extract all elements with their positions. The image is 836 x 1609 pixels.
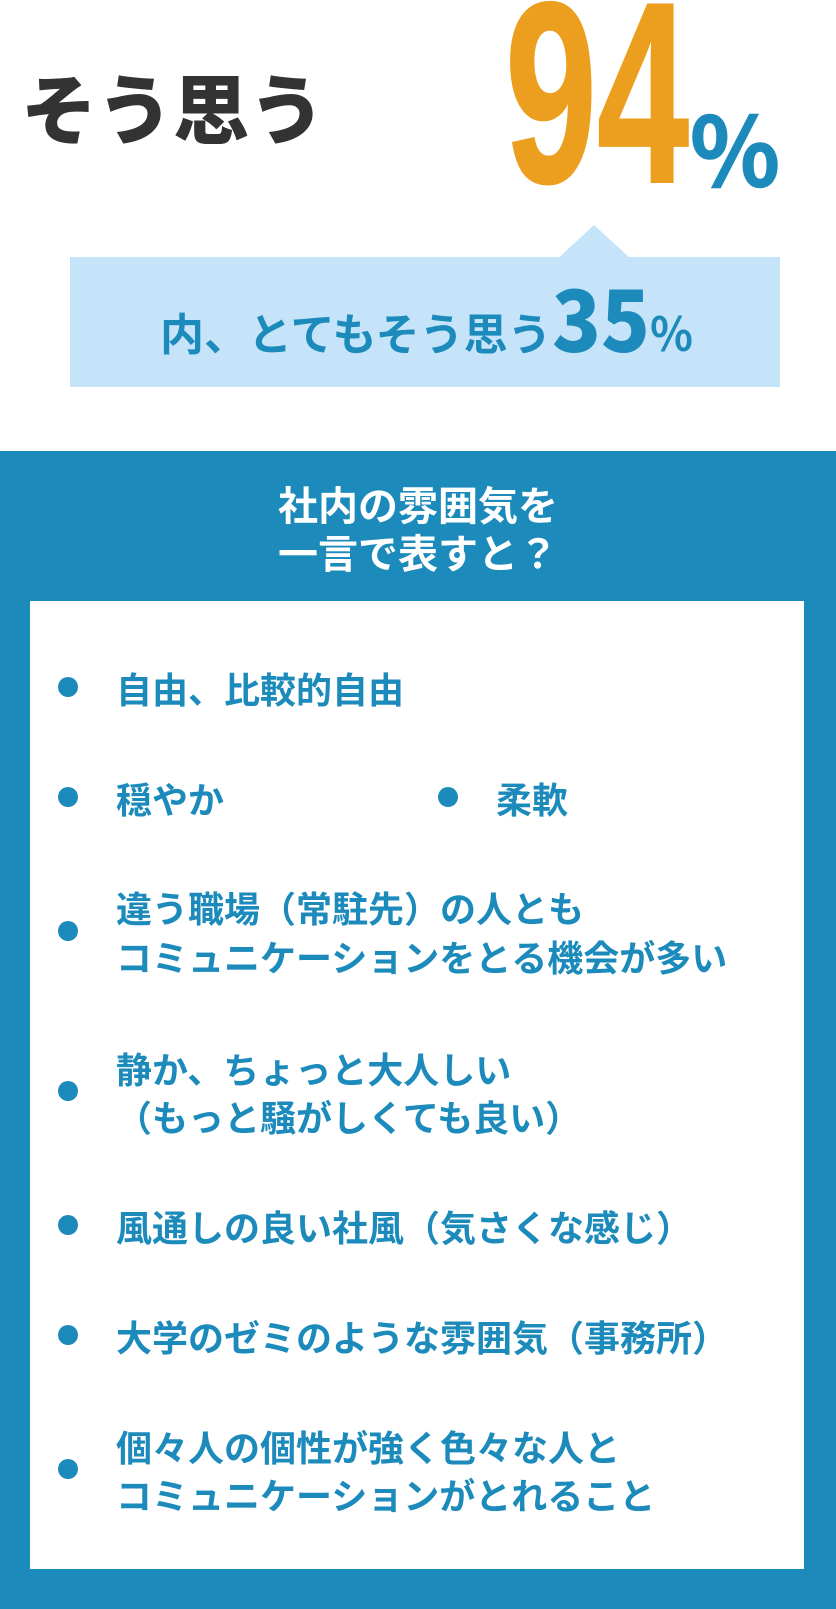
- item: 大学のゼミ: 大学のゼミのような雰囲気（事務所）: [116, 1310, 728, 1362]
- item: 穏やか: 穏やか: [116, 772, 224, 824]
- percent sign: %: [690, 77, 780, 214]
- item: 自由: 自由、比較的自由: [116, 662, 404, 714]
- heading: そう思う: そう思う: [21, 50, 325, 160]
- answer list card: [30, 601, 804, 1569]
- panel heading: 一言で表すと？: [278, 522, 558, 580]
- item: 静か: （もっと騒がしくても良い）: [116, 1090, 581, 1142]
- item: 静か: 静か、ちょっと大人しい: [116, 1042, 511, 1094]
- item: 柔軟: [438, 772, 568, 824]
- item: 個々人: 個々人の個性が強く色々な人と: [116, 1420, 620, 1472]
- item: 違う職場: 違う職場（常駐先）の人とも: [116, 881, 584, 933]
- item: 個々人: [58, 1420, 655, 1520]
- item: 柔軟: 柔軟: [496, 772, 568, 824]
- item: 風通し: 風通しの良い社風（気さくな感じ）: [116, 1200, 692, 1252]
- panel: 社内の雰囲気: [0, 451, 836, 1609]
- item: 個々人: コミュニケーションがとれること: [116, 1468, 655, 1520]
- callout label: 内、とてもそう思う: [160, 299, 552, 363]
- callout percent sign: %: [650, 296, 693, 365]
- callout background: [70, 225, 780, 387]
- panel background: [0, 451, 836, 1609]
- item: 違う職場: [58, 881, 727, 982]
- item: 違う職場: コミュニケーションをとる機会が多い: [116, 930, 727, 982]
- panel heading: 社内の雰囲気を: [278, 474, 558, 532]
- panel heading: [278, 474, 558, 580]
- callout: とてもそう思う 35%: [70, 225, 780, 387]
- item: 穏やか: [58, 772, 224, 824]
- callout number: 35: 35: [552, 256, 650, 377]
- item: 静か: [58, 1042, 581, 1142]
